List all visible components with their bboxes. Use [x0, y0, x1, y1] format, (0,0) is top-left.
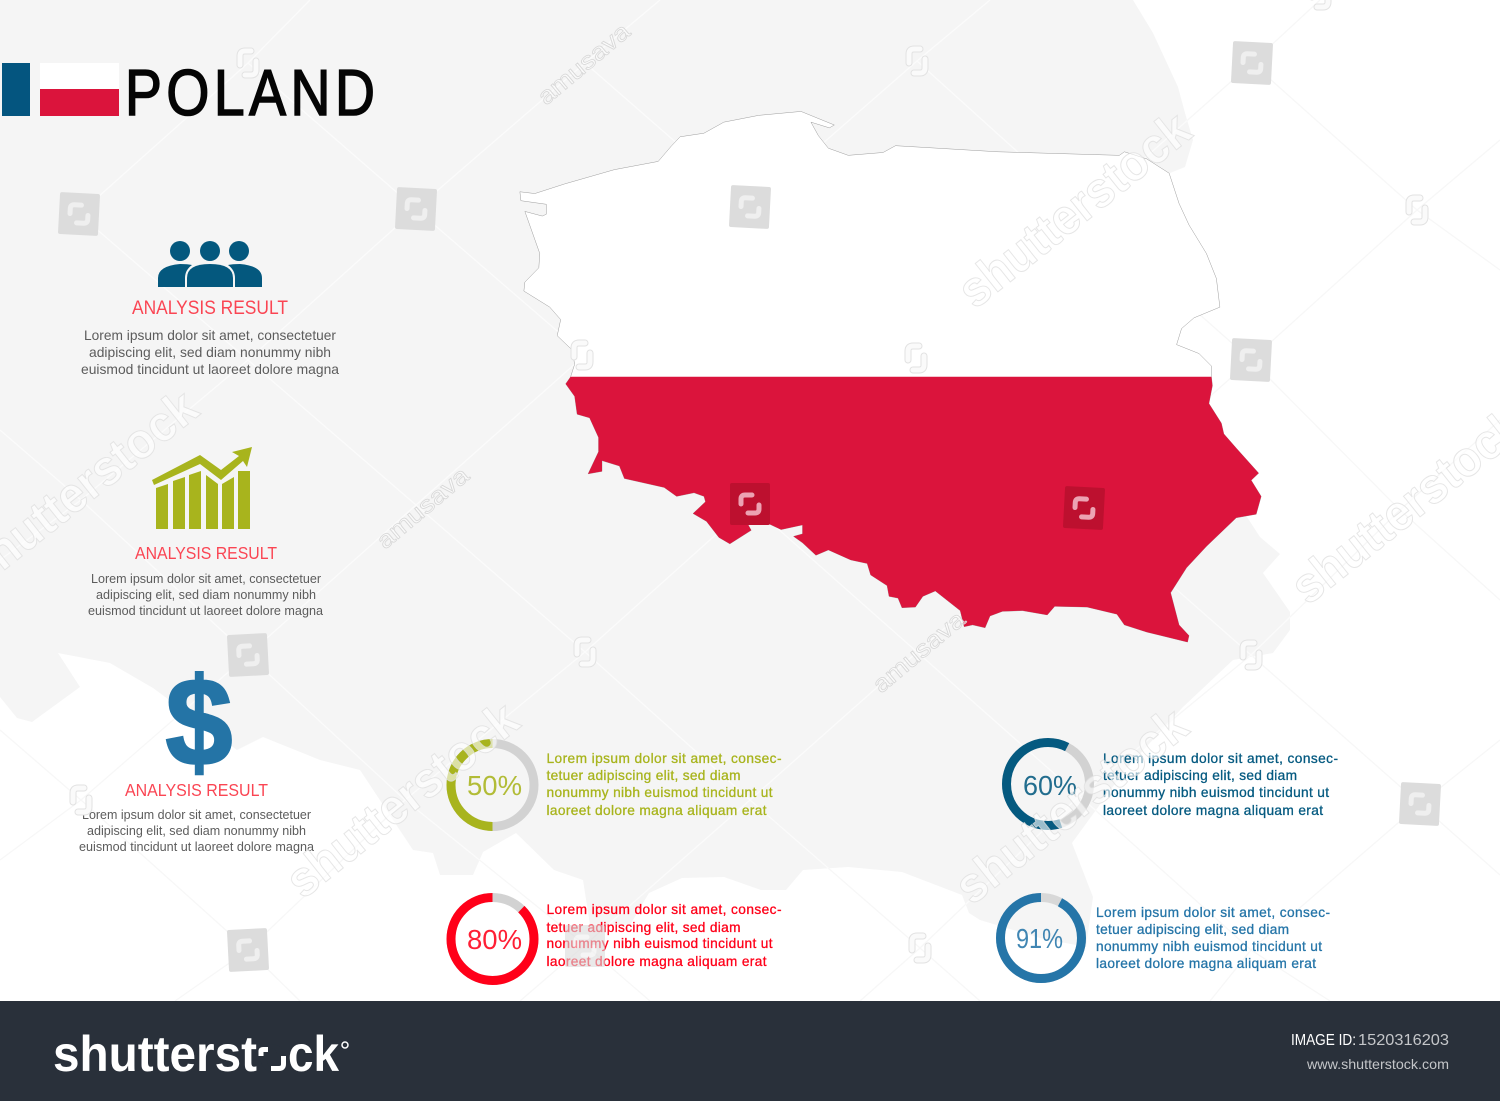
text block: tetuer adipiscing elit, sed diam — [546, 920, 740, 935]
text block: tetuer adipiscing elit, sed diam — [1096, 922, 1289, 937]
background: neighbouring land shape — [0, 0, 1290, 947]
text block: adipiscing elit, sed diam nonummy nibh — [87, 823, 306, 838]
text block: Lorem ipsum dolor sit amet, consectetuer — [91, 571, 322, 586]
shutterstock logo: o — [259, 1026, 285, 1082]
text block — [546, 902, 782, 969]
footer bar — [0, 1001, 1500, 1101]
watermark overlay: shutterstock — [944, 696, 1198, 915]
text block: laoreet dolore magna aliquam erat — [1103, 803, 1323, 818]
panel: 50% stat — [451, 744, 782, 826]
text block: laoreet dolore magna aliquam erat — [546, 803, 767, 818]
title: POLAND — [125, 56, 375, 129]
heading: ANALYSIS RESULT — [125, 780, 268, 800]
panel: analysis result 3 — [79, 652, 315, 854]
text block — [88, 571, 324, 618]
icon: rising bar chart with arrow — [152, 447, 252, 529]
icon: dollar sign: $ — [166, 652, 232, 792]
watermark overlay: shutterstock — [947, 100, 1201, 319]
image id number: 1520316203 — [1358, 1032, 1449, 1049]
text block: nonummy nibh euismod tincidunt ut — [1103, 785, 1329, 800]
donut chart: 50% — [451, 744, 534, 826]
donut chart: 91% — [1000, 898, 1082, 978]
percentage: 80% — [467, 924, 522, 955]
text block: Lorem ipsum dolor sit amet, consec- — [546, 902, 782, 917]
heading: ANALYSIS RESULT — [132, 298, 288, 319]
panel: 91% stat — [1000, 898, 1330, 978]
text block: adipiscing elit, sed diam nonummy nibh — [96, 587, 316, 602]
text block: nonummy nibh euismod tincidunt ut — [546, 785, 773, 800]
heading: ANALYSIS RESULT — [135, 543, 277, 563]
icon: three people — [158, 241, 262, 287]
icon: Polish flag with blue bar — [2, 63, 119, 116]
watermark overlay: shutterstock — [275, 690, 529, 909]
text block: Lorem ipsum dolor sit amet, consec- — [1096, 905, 1330, 920]
panel: analysis result 1 — [81, 241, 339, 377]
panel: 80% stat — [451, 898, 782, 980]
percentage: 50% — [467, 770, 522, 801]
text block: laoreet dolore magna aliquam erat — [1096, 956, 1316, 971]
text block: adipiscing elit, sed diam nonummy nibh — [89, 344, 331, 360]
website: www.shutterstock.com — [1306, 1056, 1449, 1072]
text block — [79, 807, 315, 854]
map of Poland with flag colours — [520, 111, 1261, 642]
donut chart: 60% — [1006, 742, 1090, 826]
donut chart: 80% — [451, 898, 534, 980]
watermark overlay: amusava — [533, 17, 636, 111]
text block: tetuer adipiscing elit, sed diam — [546, 768, 740, 783]
percentage: 60% — [1023, 770, 1077, 801]
text block: euismod tincidunt ut laoreet dolore magna — [88, 603, 324, 618]
text block — [81, 327, 339, 377]
text block: euismod tincidunt ut laoreet dolore magna — [81, 361, 339, 377]
text block: nonummy nibh euismod tincidunt ut — [1096, 939, 1322, 954]
watermark overlay: amusava — [868, 605, 971, 699]
text block: Lorem ipsum dolor sit amet, consec- — [546, 751, 782, 766]
shutterstock logo: shutterst — [53, 1026, 257, 1082]
text block — [1096, 905, 1330, 971]
image id: IMAGE ID: — [1291, 1032, 1356, 1049]
percentage: 91% — [1016, 923, 1063, 954]
watermark overlay: amusava — [372, 461, 475, 555]
text block — [546, 751, 782, 818]
text block: Lorem ipsum dolor sit amet, consectetuer — [84, 327, 336, 343]
panel: analysis result 2 — [88, 447, 324, 618]
text block: euismod tincidunt ut laoreet dolore magna — [79, 839, 315, 854]
text block: tetuer adipiscing elit, sed diam — [1103, 768, 1297, 783]
shutterstock logo: ck — [288, 1026, 339, 1082]
text block: laoreet dolore magna aliquam erat — [546, 954, 767, 969]
text block: nonummy nibh euismod tincidunt ut — [546, 936, 773, 951]
panel: 60% stat — [1006, 742, 1338, 826]
text block — [1103, 751, 1338, 818]
text block: Lorem ipsum dolor sit amet, consec- — [1103, 751, 1338, 766]
text block: Lorem ipsum dolor sit amet, consectetuer — [82, 807, 312, 822]
